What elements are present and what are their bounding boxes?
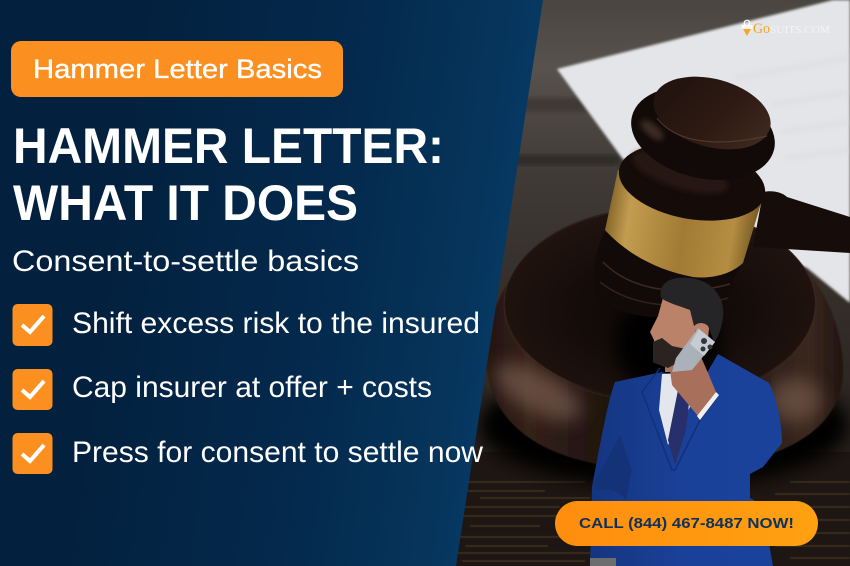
item 3: Press for consent to settle now: [72, 436, 483, 469]
title: HAMMER LETTER:: [13, 118, 444, 174]
necktie: [668, 390, 690, 465]
neck: [665, 345, 700, 372]
logo lock icon: [742, 20, 752, 36]
watch: [590, 558, 616, 566]
badge: Hammer Letter Basics: Hammer Letter Basics: [33, 54, 322, 84]
gavel lower collar: [593, 232, 743, 318]
item 2: Cap insurer at offer + costs: [72, 371, 432, 404]
document paper: [557, 0, 850, 303]
title: [13, 118, 444, 231]
gavel middle ridge: [613, 133, 771, 231]
face: [650, 296, 710, 368]
jacket lapel: [642, 368, 715, 470]
GoSuits logo: [742, 20, 830, 37]
beard: [653, 330, 702, 368]
title: WHAT IT DOES: [13, 175, 358, 231]
gavel: [593, 65, 850, 318]
gavel top cap: [622, 65, 784, 193]
item 2: [12, 369, 432, 410]
suit jacket: [590, 354, 782, 566]
dark navy panel: [0, 0, 543, 566]
shirt cuff: [697, 392, 719, 420]
desk background: [440, 0, 850, 566]
shirt: [659, 372, 700, 445]
sleeve shadow: [592, 435, 632, 500]
checklist: [12, 304, 483, 474]
item 1: Shift excess risk to the insured: [72, 307, 480, 340]
badge: Hammer Letter Basics: [11, 41, 343, 97]
GoSuits logo: Go: [753, 21, 770, 37]
phone: [672, 328, 715, 372]
gold band: [605, 170, 763, 277]
call to action button: CALL (844) 467-8487 NOW!: [579, 516, 794, 532]
call to action button: [555, 501, 818, 546]
paper text lines: [735, 58, 850, 158]
subtitle: Consent-to-settle basics: [12, 245, 359, 278]
GoSuits logo: SUITS.COM: [770, 25, 830, 36]
sounding block: [479, 207, 849, 487]
gavel handle: [753, 191, 850, 253]
lawyer on phone: [590, 278, 782, 566]
item 1: [12, 304, 480, 346]
hair: [661, 278, 723, 342]
hand: [670, 350, 716, 416]
